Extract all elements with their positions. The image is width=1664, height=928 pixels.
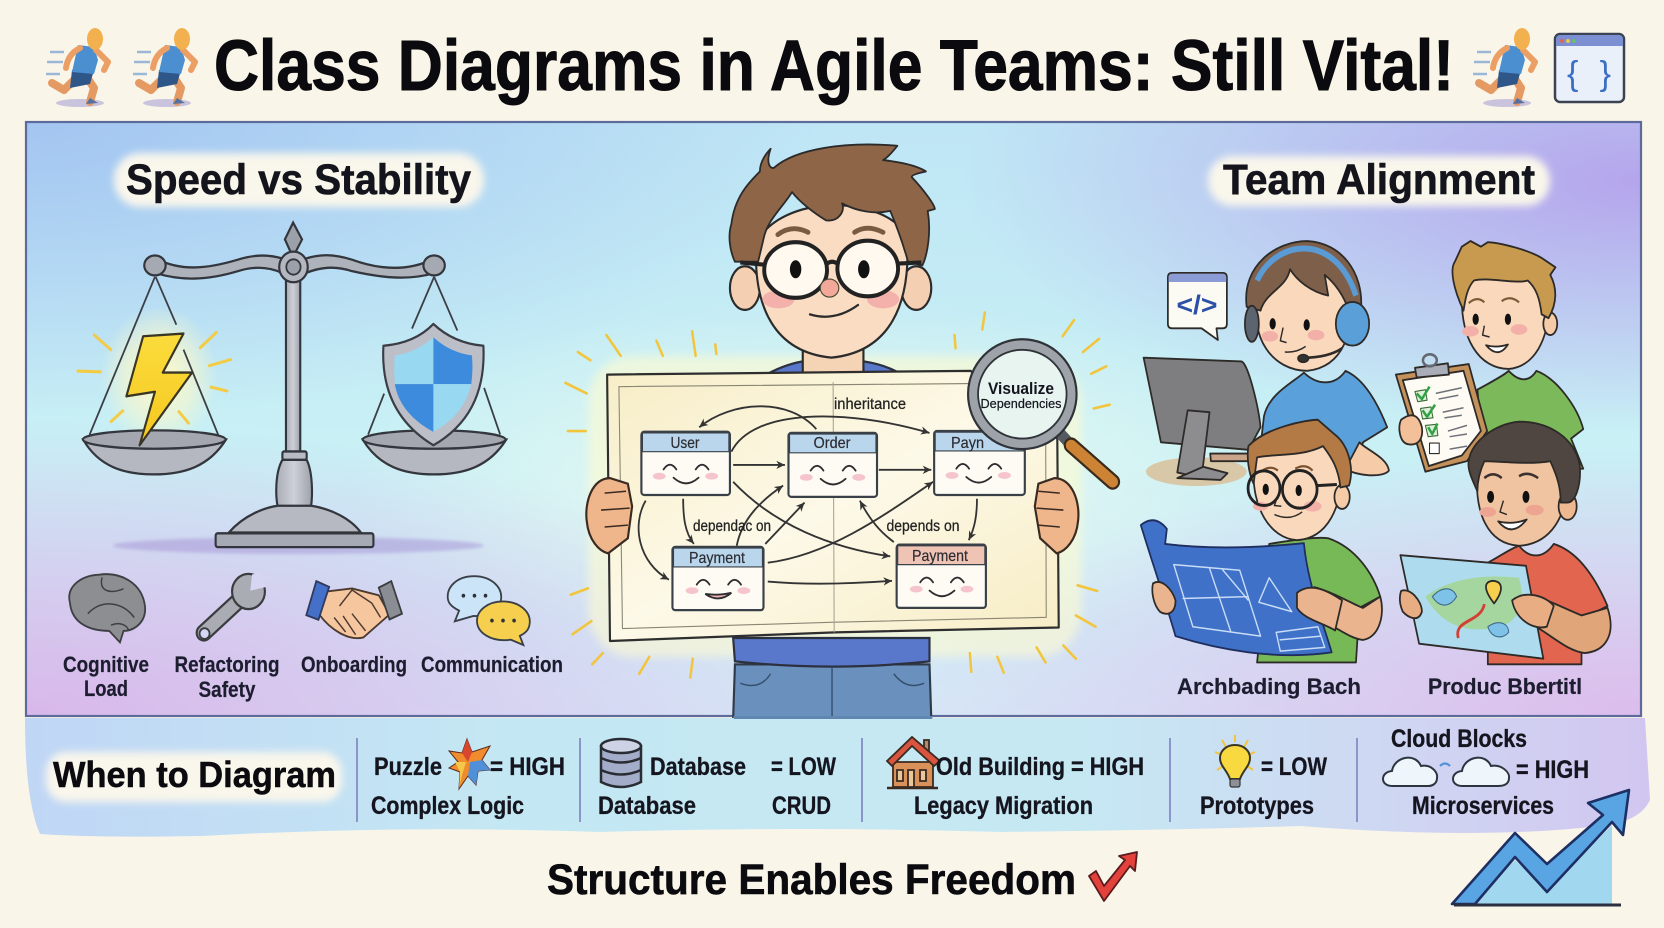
pivot: [279, 252, 308, 282]
paper glow: [589, 356, 1081, 657]
label: refactoring safety: Refactoring: [174, 652, 280, 677]
band background: [25, 718, 1650, 837]
item: database crud: CRUD: [772, 792, 831, 820]
icon: runner 1: [46, 28, 108, 107]
item: prototypes: Prototypes: [1200, 792, 1314, 820]
title text: Class Diagrams in Agile Teams: Still Vital!: [214, 27, 1454, 106]
person: developer with headset: [1245, 241, 1389, 475]
icon: handshake: [306, 581, 402, 638]
person: architect with blueprint: [1248, 420, 1382, 662]
icon: chat bubbles: [448, 576, 530, 645]
jeans: [733, 664, 931, 719]
label: refactoring safety: [174, 652, 280, 702]
icon: puzzle burst: [449, 739, 490, 789]
scale shadow: [113, 537, 484, 554]
diagram labels: Payment: [689, 550, 745, 567]
eyes: [790, 260, 801, 278]
item: database crud: = LOW: [771, 753, 836, 781]
item: microservices: [1383, 725, 1589, 820]
panel: team alignment: [1141, 156, 1611, 699]
chains: [90, 277, 500, 435]
icon: code window: { }: [1567, 55, 1611, 93]
diagram labels: [670, 396, 984, 567]
lightning rays: [78, 332, 231, 423]
monitor: [1144, 358, 1261, 486]
label: architect: Archbading Bach: [1177, 674, 1361, 699]
hair: [730, 145, 935, 265]
class box: payment lower left: [672, 547, 763, 610]
diagram arrows: [639, 406, 977, 584]
icon: red check arrow: [1089, 852, 1137, 901]
map: [1400, 555, 1554, 659]
label: cognitive load: [63, 652, 149, 701]
item: legacy migration: Old Building = HIGH: [936, 753, 1144, 781]
label: cognitive load: Cognitive: [63, 652, 149, 677]
dividers: [357, 738, 1357, 822]
label: communication: Communication: [421, 652, 563, 677]
nose: [820, 279, 839, 297]
finial: [285, 223, 302, 252]
shirt lower: [733, 638, 929, 667]
icon: runner 3: [1473, 28, 1535, 107]
code symbol in bubble: </>: [1176, 290, 1218, 320]
ears: [730, 266, 760, 310]
growth chart arrow: [1452, 790, 1629, 905]
base: [282, 451, 307, 460]
pan left: [83, 440, 226, 474]
item: legacy migration: [887, 737, 1144, 820]
blueprint: [1141, 520, 1342, 655]
icon: runner 2: [133, 28, 195, 107]
magnifier label: [980, 379, 1062, 411]
item: complex logic: = HIGH: [490, 753, 565, 781]
sparkle rays: [565, 313, 1110, 678]
panel: central developer with class diagram: [565, 145, 1113, 719]
class box: order: [788, 433, 877, 497]
hand left: [586, 478, 632, 553]
icon: brain: [69, 574, 145, 642]
title row: [46, 27, 1624, 107]
eyebrows: [778, 228, 883, 235]
developer and diagram artwork: [565, 145, 1113, 719]
icon: database: [601, 739, 641, 787]
item: microservices: Microservices: [1412, 792, 1554, 820]
icon: shield: [383, 324, 484, 445]
magnifier: [968, 339, 1113, 482]
panel: main illustration: [26, 122, 1641, 719]
heading: when to diagram: When to Diagram: [53, 754, 336, 795]
diagram labels: User: [670, 435, 700, 452]
mouth: [810, 305, 858, 317]
code speech bubble: [1168, 273, 1227, 340]
person: product owner with clipboard: [1452, 241, 1583, 469]
neck: [803, 341, 863, 375]
icon: code window: [1555, 34, 1624, 102]
icon: lightning bolt: [126, 334, 192, 445]
icon: light bulb: [1215, 735, 1255, 787]
item: database crud: Database: [598, 792, 696, 820]
icon: wrench: [200, 572, 266, 639]
pan right: [363, 440, 506, 474]
diagram labels: dependac on: [693, 518, 771, 535]
item: complex logic: Puzzle: [374, 753, 442, 781]
label: onboarding: Onboarding: [301, 652, 407, 677]
item: prototypes: [1200, 735, 1327, 820]
diagram labels: depends on: [886, 518, 960, 535]
item: legacy migration: Legacy Migration: [914, 792, 1093, 820]
person: dark-haired with map: [1468, 422, 1611, 664]
class box: payment top right: [934, 431, 1025, 495]
icon: house: [887, 737, 940, 788]
magnifier label: Visualize: [988, 379, 1054, 398]
item: prototypes: = LOW: [1261, 753, 1327, 781]
hand right: [1035, 478, 1078, 553]
balance scale: [69, 223, 530, 645]
item: database crud: [598, 739, 836, 820]
team artwork: [1141, 241, 1611, 664]
label: cognitive load: Load: [84, 676, 128, 701]
label: refactoring safety: Safety: [198, 677, 256, 702]
item: microservices: = HIGH: [1516, 756, 1589, 784]
class box: payment lower right: [897, 545, 986, 608]
face: [756, 205, 908, 358]
heading: speed vs stability: Speed vs Stability: [126, 156, 471, 204]
post: [286, 281, 300, 453]
item: database crud: Database: [650, 753, 746, 781]
jeans overlap: [733, 716, 933, 719]
diagram labels: Payn: [951, 435, 984, 452]
panel: speed vs stability: [63, 153, 563, 702]
diagram paper: [607, 371, 1059, 641]
glow behind lightning: [100, 306, 218, 447]
diagram labels: Order: [814, 435, 851, 452]
item: microservices: Cloud Blocks: [1391, 725, 1527, 753]
diagram labels: Payment: [912, 548, 968, 565]
beam: [156, 255, 434, 279]
glasses: [740, 241, 921, 298]
clipboard: [1396, 354, 1487, 472]
class box: user: [641, 432, 730, 495]
diagram labels: inheritance: [834, 396, 906, 413]
cheeks: [762, 290, 795, 308]
icon: clouds: [1383, 758, 1509, 786]
panel: when to diagram: [25, 716, 1650, 837]
heading: team alignment: Team Alignment: [1223, 156, 1535, 204]
magnifier label: Dependencies: [980, 397, 1062, 411]
footer tagline: Structure Enables Freedom: [547, 856, 1076, 904]
item: complex logic: [371, 739, 565, 820]
label: product: Produc Bbertitl: [1428, 674, 1582, 699]
shirt upper: [760, 361, 905, 378]
item: complex logic: Complex Logic: [371, 792, 524, 820]
